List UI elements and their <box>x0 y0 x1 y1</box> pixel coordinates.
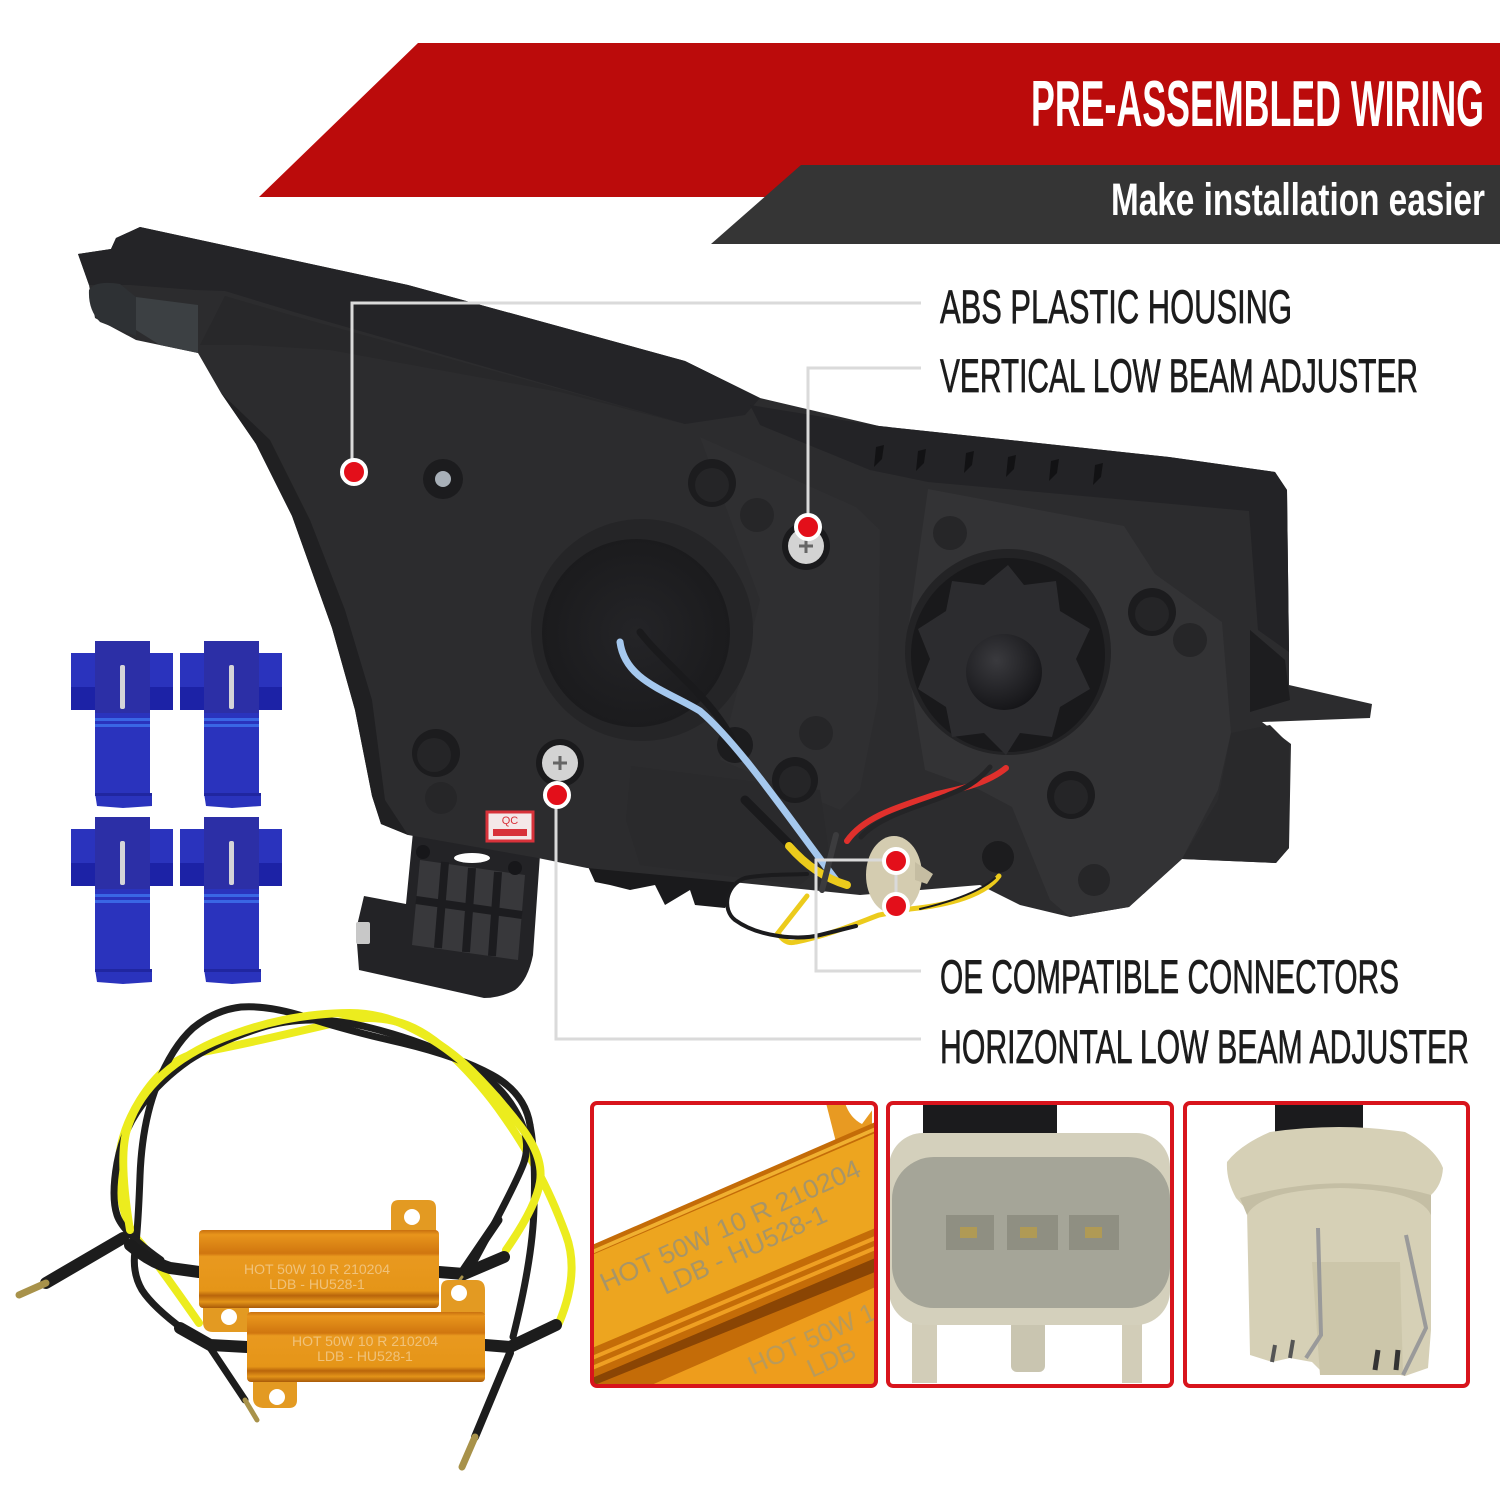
lower plate <box>626 766 830 885</box>
label: housing: ABS PLASTIC HOUSING <box>940 280 1292 333</box>
load resistors <box>199 1200 485 1408</box>
small bulb cap <box>905 549 1111 755</box>
load resistor wires <box>19 1007 572 1467</box>
front resistor: HOT 50W 10 R 210204 <box>292 1333 438 1349</box>
QC sticker: QC <box>502 815 518 827</box>
detail panel: resistor <box>592 1103 880 1400</box>
QC sticker <box>487 812 533 841</box>
rear resistor: LDB - HU528-1 <box>269 1276 365 1292</box>
detail panel: three pin connector <box>888 1103 1172 1386</box>
detail panel: resistor: HOT 50W 10 R 210204 <box>595 1153 865 1297</box>
detail panel: bulb socket <box>1185 1103 1468 1386</box>
connector <box>866 836 933 914</box>
detail panel: resistor: HOT 50W 1 <box>743 1297 880 1380</box>
middle raised panel <box>700 437 880 810</box>
callout dots <box>342 460 908 918</box>
mounting bracket <box>356 832 540 998</box>
bolts <box>412 459 1176 873</box>
screws <box>782 522 830 570</box>
right clip <box>1250 630 1290 712</box>
large bulb cap <box>531 519 753 741</box>
lower bumps <box>585 860 735 908</box>
upper flange <box>78 227 760 424</box>
headlamp rear housing <box>78 227 1372 998</box>
right raised panel <box>905 489 1231 917</box>
faint moulded circles <box>425 498 1207 896</box>
rear resistor: HOT 50W 10 R 210204 <box>244 1261 390 1277</box>
front resistor <box>247 1280 485 1408</box>
top ribbed rim <box>750 405 1289 652</box>
detail panel: resistor: LDB <box>802 1335 861 1383</box>
heat-shrink leads <box>46 1238 123 1283</box>
T-tap connectors <box>71 641 282 984</box>
dark sub-banner <box>711 165 1500 244</box>
front resistor: LDB - HU528-1 <box>317 1348 413 1364</box>
red banner <box>259 43 1500 197</box>
housing body <box>78 227 1372 917</box>
wiring harness <box>620 632 1006 943</box>
left rim shade <box>221 393 408 835</box>
leader lines <box>352 303 921 1039</box>
detail panel: resistor: LDB - HU528-1 <box>655 1199 831 1300</box>
rear resistor <box>199 1200 439 1332</box>
adjuster lug <box>136 297 198 353</box>
